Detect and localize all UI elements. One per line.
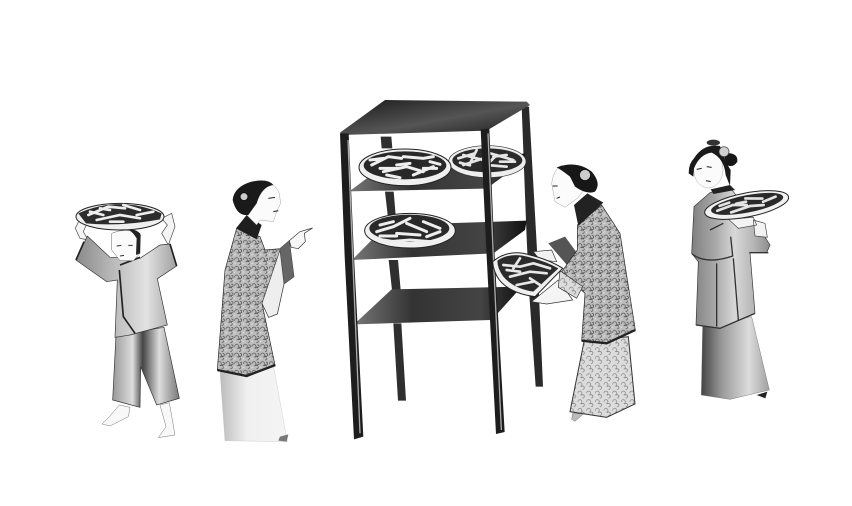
figure: woman pointing <box>217 181 313 442</box>
skirt <box>570 337 635 417</box>
shelf top board <box>340 100 530 135</box>
collar <box>711 185 735 194</box>
shoe <box>572 413 583 421</box>
skirt <box>701 317 769 399</box>
tray: middle <box>365 213 455 248</box>
figure: woman holding tray, right <box>689 140 791 399</box>
boy feet <box>102 403 175 438</box>
lower sleeve <box>558 271 583 298</box>
tray: upper left <box>359 149 451 186</box>
lower hand and tray base <box>532 280 573 304</box>
jacket trim <box>76 242 177 333</box>
figure: boy carrying tray on head <box>75 203 179 438</box>
robe <box>562 205 635 343</box>
pointing hand <box>289 228 313 249</box>
boy arms <box>75 213 175 245</box>
upper hand <box>533 250 557 262</box>
tray <box>493 253 563 297</box>
hem <box>582 330 635 343</box>
front legs <box>340 129 505 439</box>
shelf bottom <box>354 287 522 324</box>
boy jacket <box>76 236 177 337</box>
robe <box>217 228 294 377</box>
skirt <box>220 365 287 442</box>
back legs <box>381 107 543 401</box>
tray <box>702 185 791 225</box>
boy tray <box>76 203 164 230</box>
hem <box>217 365 275 376</box>
sleeve fold <box>692 223 768 327</box>
tray: upper right <box>449 146 526 178</box>
shelf rack with trays <box>340 100 543 439</box>
sleeve inner <box>262 250 284 317</box>
shoe <box>278 434 288 442</box>
robe body <box>692 187 770 328</box>
sleeve cuff <box>280 241 294 284</box>
head <box>233 181 281 225</box>
shoe <box>757 392 767 398</box>
head <box>552 165 598 207</box>
shelf middle <box>352 221 527 260</box>
collar <box>574 193 603 226</box>
boy trousers <box>113 327 179 407</box>
hand <box>729 217 767 237</box>
shelf upper <box>349 153 525 191</box>
figure: woman holding tray at shelf <box>493 165 635 421</box>
collar <box>236 215 262 239</box>
head <box>689 140 737 188</box>
hem <box>696 313 755 328</box>
boy head <box>112 229 141 261</box>
far sleeve <box>548 237 577 267</box>
